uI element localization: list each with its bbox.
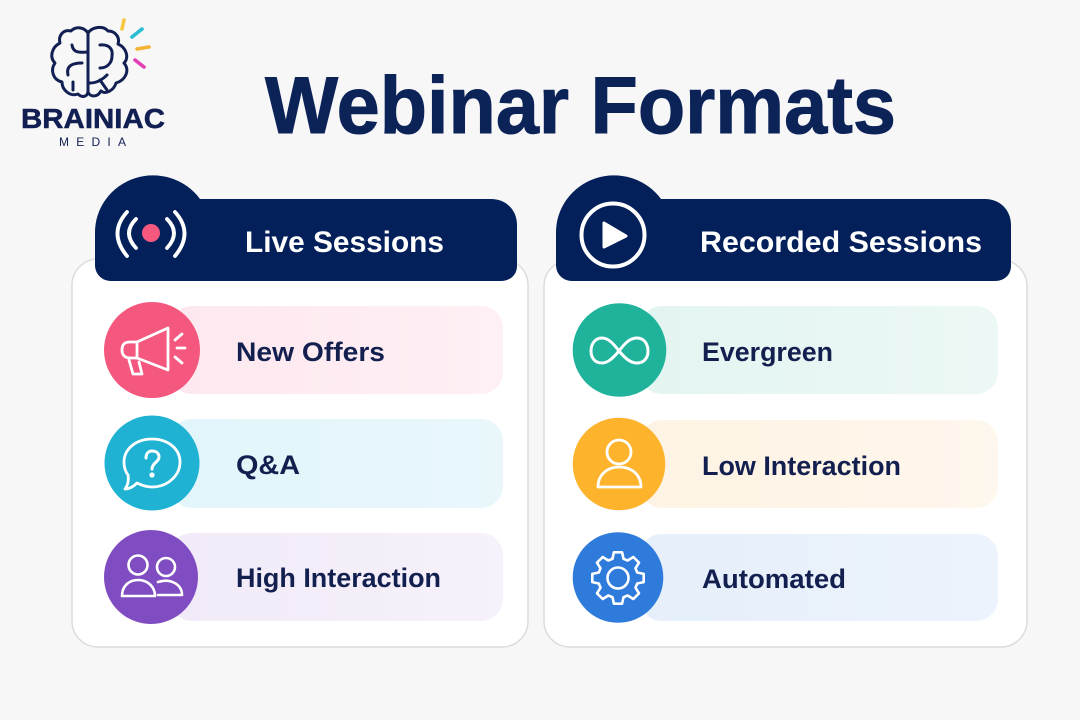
label: New Offers <box>236 337 385 367</box>
row pill <box>170 419 503 508</box>
panel: live sessions <box>72 175 528 647</box>
row pill <box>170 533 503 621</box>
icon circle <box>104 302 200 398</box>
icon: question bubble <box>124 439 180 489</box>
row pill <box>640 306 998 394</box>
icon: megaphone <box>122 328 185 374</box>
title: Webinar Formats <box>265 61 896 151</box>
row: automated <box>573 532 998 623</box>
icon circle <box>573 532 663 623</box>
icon: gear <box>592 552 644 604</box>
logo: Brainiac Media <box>21 20 165 149</box>
icon circle <box>573 303 666 397</box>
logo subtitle: MEDIA <box>59 135 126 149</box>
label: Low Interaction <box>702 451 901 481</box>
icon circle <box>104 530 198 624</box>
card background <box>72 259 528 647</box>
logo wordmark: BRAINIAC <box>21 103 165 134</box>
icon: colored spark rays <box>122 20 149 67</box>
header tab <box>95 175 517 281</box>
icon: broadcast <box>118 212 184 256</box>
icon circle <box>104 416 200 510</box>
label: Evergreen <box>702 337 833 367</box>
row: high interaction <box>104 530 503 624</box>
row pill <box>640 420 998 508</box>
icon: brain <box>52 27 127 96</box>
icon: user <box>598 440 641 487</box>
row: low interaction <box>573 418 998 510</box>
label: Q&A <box>236 450 300 480</box>
row: Q&A <box>104 416 503 510</box>
icon: infinity <box>591 338 648 363</box>
label: High Interaction <box>236 563 441 593</box>
header tab <box>556 175 1011 281</box>
panel: recorded sessions <box>544 175 1027 647</box>
card background <box>544 260 1027 647</box>
row: new offers <box>104 302 503 398</box>
heading: Live Sessions <box>245 226 444 259</box>
row pill <box>640 534 998 621</box>
icon: two users <box>122 556 182 596</box>
row: evergreen <box>573 303 998 397</box>
icon circle <box>573 418 665 510</box>
row pill <box>170 306 503 394</box>
label: Automated <box>702 564 846 594</box>
heading: Recorded Sessions <box>700 226 982 259</box>
icon: play button <box>582 204 644 266</box>
